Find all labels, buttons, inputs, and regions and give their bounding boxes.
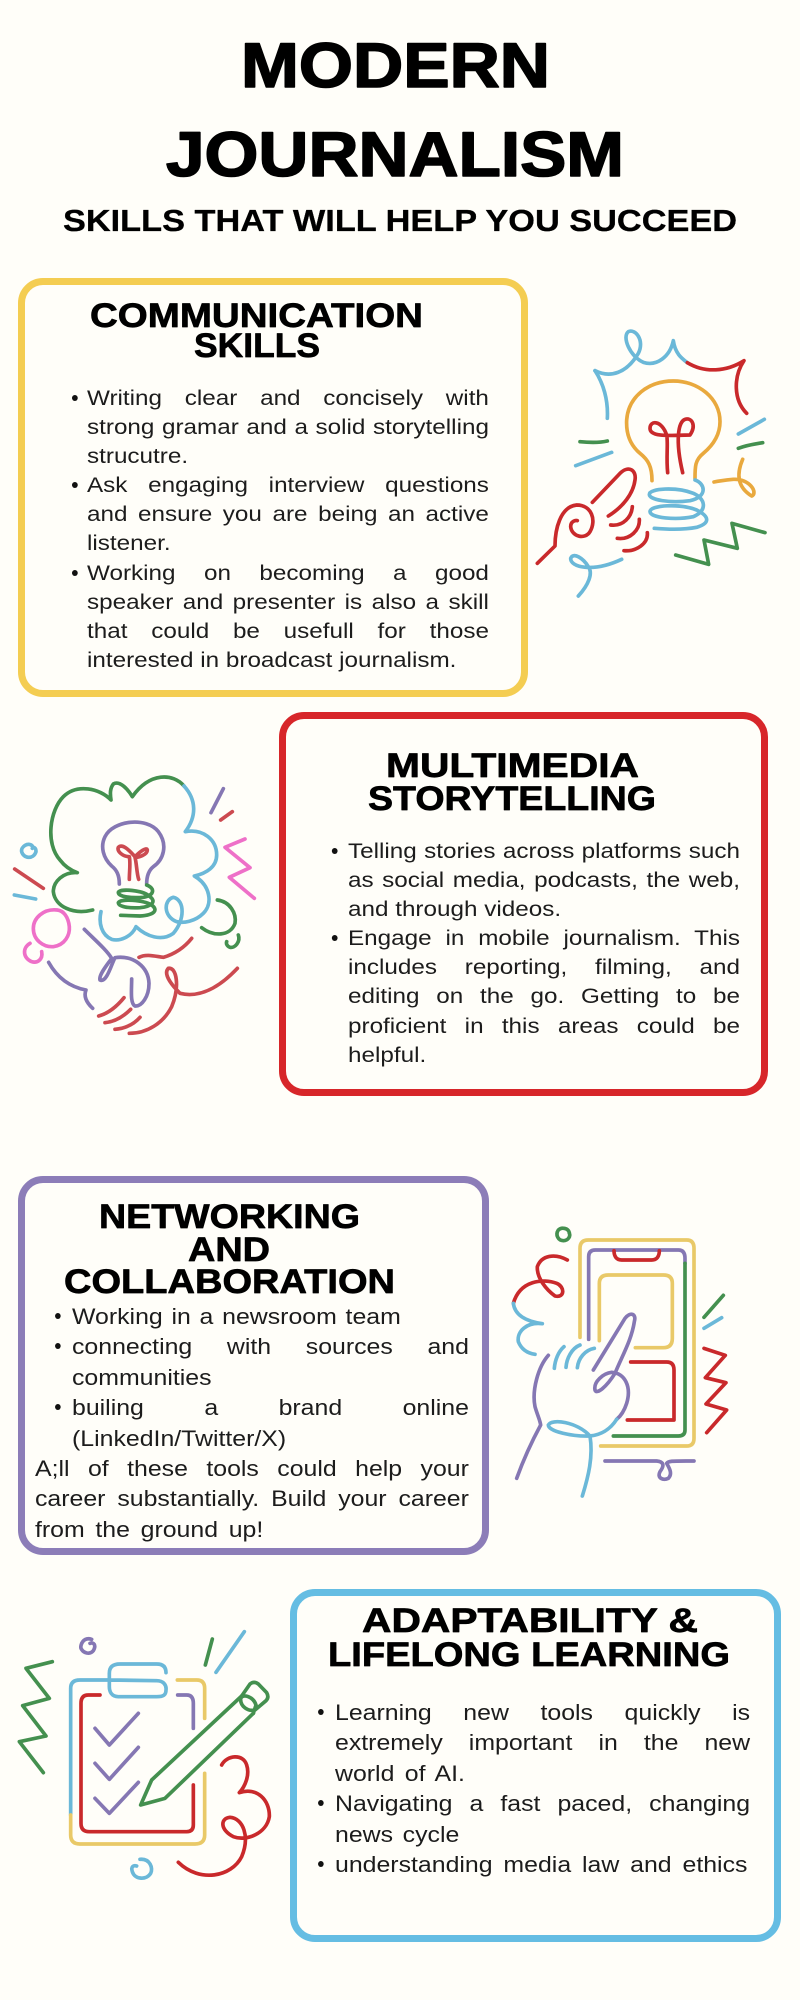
bullet list: adaptability: Learning new tools quickly is: [335, 1700, 750, 1725]
icon: light bulb with pointing hand: [535, 329, 767, 598]
closing paragraph: A;ll of these tools could help your: [35, 1456, 469, 1481]
title: JOURNALISM: [166, 120, 624, 190]
bullet list: multimedia storytelling: Telling stories across platforms such: [348, 840, 740, 863]
title: MODERN: [241, 31, 550, 101]
panel: communication skills: [18, 278, 528, 697]
bullet list: adaptability: [318, 1700, 750, 1877]
heading: networking and collaboration: AND: [188, 1231, 270, 1269]
bullet list: communication skills: [72, 387, 489, 672]
heading: adaptability and lifelong learning: LIFELONG LEARNING: [328, 1636, 730, 1674]
bullet list: communication skills: interested in broadcast journalism.: [87, 649, 456, 672]
bullet list: multimedia storytelling: as social media, podcasts, the web,: [348, 869, 740, 892]
bullet list: networking: communities: [72, 1365, 212, 1390]
bullet list: multimedia storytelling: Engage in mobile journalism. This: [348, 927, 740, 950]
heading: multimedia storytelling: MULTIMEDIA: [386, 747, 639, 785]
bullet list: adaptability: understanding media law and ethics: [335, 1852, 747, 1877]
bullet list: networking: Working in a newsroom team: [72, 1304, 401, 1329]
panel: networking and collaboration: [18, 1176, 489, 1555]
heading: multimedia storytelling: STORYTELLING: [368, 780, 656, 818]
panel: adaptability and lifelong learning: [290, 1589, 781, 1942]
heading: adaptability and lifelong learning: [328, 1602, 730, 1674]
bullet list: multimedia storytelling: includes reporting, filming, and: [348, 956, 740, 979]
bullet list: communication skills: that could be usefull for those: [87, 620, 489, 643]
icon: light bulb in cloud with handshake: [12, 775, 256, 1036]
heading: networking and collaboration: [64, 1198, 395, 1301]
heading: adaptability and lifelong learning: ADAPTABILITY &: [362, 1602, 698, 1640]
heading: networking and collaboration: NETWORKING: [99, 1198, 360, 1236]
bullet list: multimedia storytelling: proficient in this areas could be: [348, 1015, 740, 1038]
closing paragraph: [35, 1456, 469, 1542]
heading: communication skills: SKILLS: [194, 327, 320, 365]
title: [166, 31, 624, 190]
bullet list: multimedia storytelling: helpful.: [348, 1044, 426, 1067]
heading: networking and collaboration: COLLABORATION: [64, 1263, 395, 1301]
bullet list: networking: (LinkedIn/Twitter/X): [72, 1426, 286, 1451]
heading: multimedia storytelling: [368, 747, 656, 818]
icon: clipboard checklist with pencil: [18, 1630, 272, 1880]
icon: hand tapping smartphone: [512, 1226, 728, 1498]
closing paragraph: career substantially. Build your career: [35, 1486, 469, 1511]
bullet list: networking: builing a brand online: [72, 1395, 469, 1420]
bullet list: adaptability: news cycle: [335, 1822, 459, 1847]
heading: communication skills: COMMUNICATION: [90, 297, 423, 335]
bullet list: adaptability: Navigating a fast paced, changing: [335, 1791, 750, 1816]
subtitle: SKILLS THAT WILL HELP YOU SUCCEED: [63, 203, 737, 238]
bullet list: adaptability: world of AI.: [335, 1761, 465, 1786]
bullet list: communication skills: Ask engaging interview questions: [87, 474, 489, 497]
bullet list: communication skills: and ensure you are being an active: [87, 503, 489, 526]
bullet list: multimedia storytelling: editing on the go. Getting to be: [348, 985, 740, 1008]
bullet list: communication skills: Working on becoming a good: [87, 562, 489, 585]
bullet list: multimedia storytelling: [332, 840, 740, 1067]
closing paragraph: from the ground up!: [35, 1517, 263, 1542]
bullet list: networking: connecting with sources and: [72, 1334, 469, 1359]
bullet list: adaptability: extremely important in the new: [335, 1730, 750, 1755]
panel: multimedia storytelling: [279, 712, 768, 1096]
bullet list: communication skills: strong gramar and a solid storytelling: [87, 416, 489, 439]
bullet list: communication skills: strucutre.: [87, 445, 188, 468]
bullet list: communication skills: listener.: [87, 532, 171, 555]
bullet list: communication skills: speaker and presenter is also a skill: [87, 591, 489, 614]
bullet list: communication skills: Writing clear and concisely with: [87, 387, 489, 410]
bullet list: multimedia storytelling: and through videos.: [348, 898, 561, 921]
bullet list: networking: [55, 1304, 469, 1451]
heading: communication skills: [90, 297, 423, 365]
